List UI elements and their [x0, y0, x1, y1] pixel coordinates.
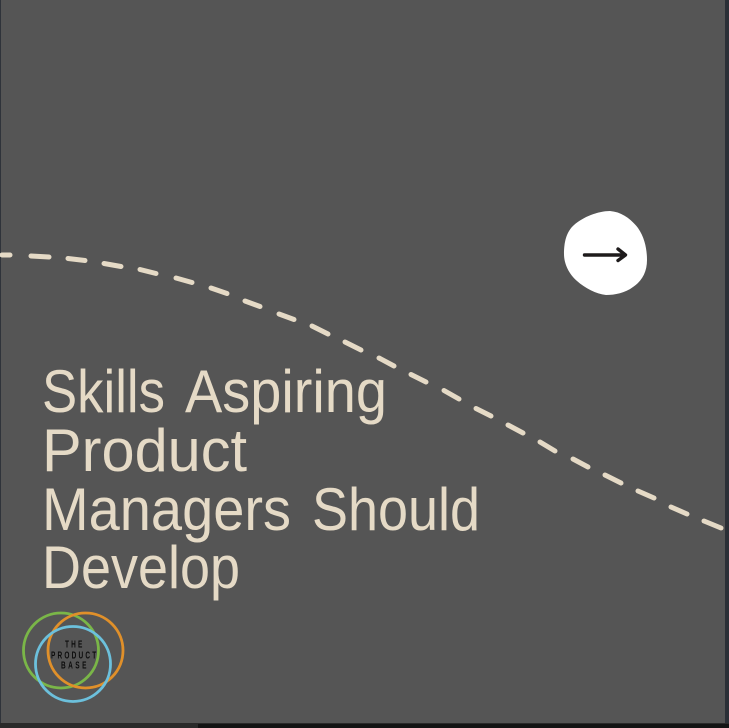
- logo text: THE: [65, 638, 82, 650]
- title: Should: [312, 476, 480, 543]
- title: [42, 358, 480, 601]
- logo: The Product Base: [24, 613, 123, 702]
- title: Skills: [42, 358, 165, 425]
- title: Product: [42, 417, 247, 484]
- logo text: BASE: [61, 659, 87, 671]
- green circle: [24, 613, 98, 688]
- title: Develop: [42, 534, 240, 601]
- title: Aspiring: [185, 358, 387, 425]
- arrow: [584, 249, 626, 260]
- dashed curve: [2, 255, 721, 528]
- logo text: [51, 638, 97, 671]
- title: Managers: [42, 476, 291, 543]
- icon: arrow button: [564, 211, 647, 295]
- white blob: [564, 211, 647, 295]
- logo text: PRODUCT: [51, 649, 97, 661]
- orange circle: [48, 613, 123, 688]
- blue circle: [36, 626, 110, 702]
